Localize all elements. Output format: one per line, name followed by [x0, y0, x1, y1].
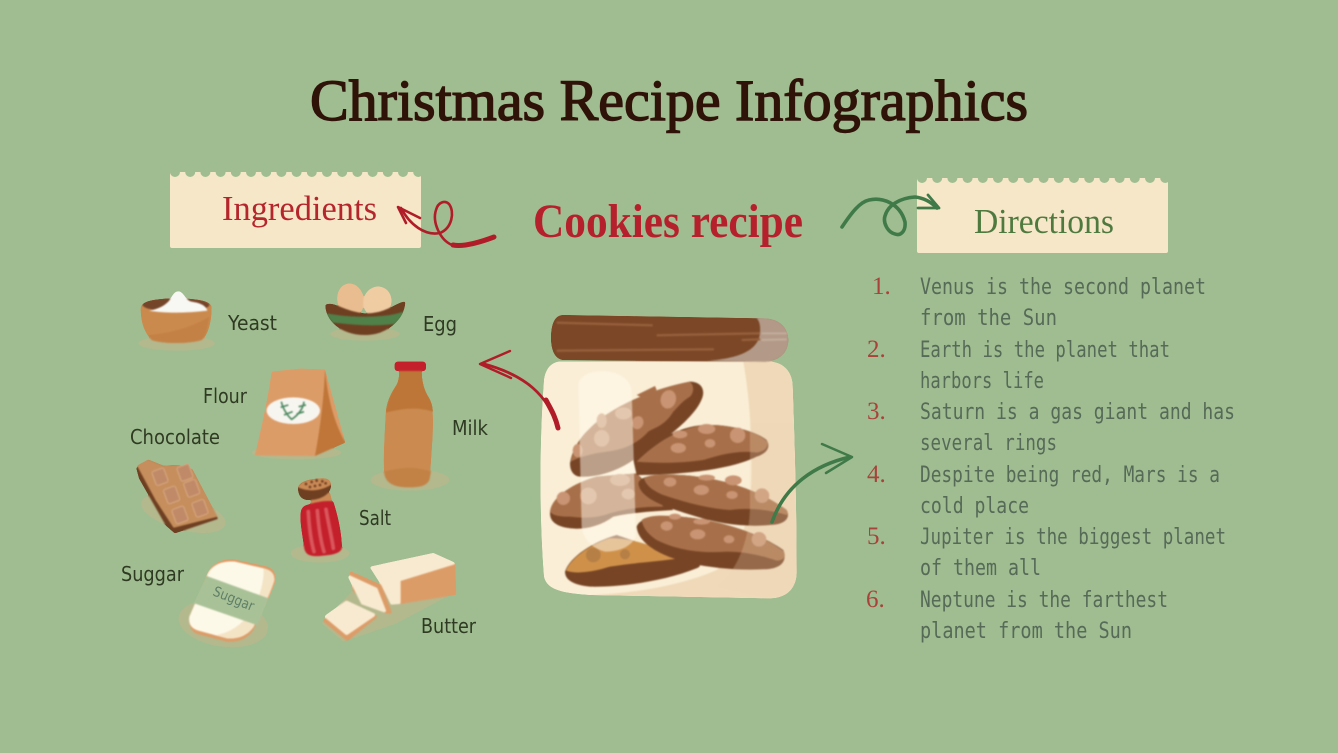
ingredient labels: Chocolate: [130, 425, 220, 449]
cookie: upper right: [633, 424, 768, 475]
step 1: [872, 273, 1206, 331]
step 6: planet from the Sun: [920, 619, 1132, 644]
ingredient labels: Yeast: [227, 311, 277, 335]
panel: directions heading: [917, 178, 1168, 253]
step 1: 1.: [872, 273, 891, 300]
step 6: [866, 586, 1168, 644]
step 6: 6.: [866, 586, 885, 613]
step 4: Despite being red, Mars is a: [920, 463, 1220, 488]
directions list: [866, 273, 1235, 644]
step 3: [867, 398, 1235, 456]
subtitle: cookies recipe: Cookies recipe: [533, 195, 803, 248]
ingredient labels: Milk: [452, 416, 488, 440]
panel: ingredients heading: [170, 172, 421, 248]
cookie: middle right: [638, 474, 788, 526]
icon: milk bottle: [371, 362, 449, 491]
step 3: Saturn is a gas giant and has: [920, 400, 1235, 425]
arrow: jar to ingredients: [480, 351, 558, 428]
icon: yeast bowl: [138, 291, 215, 351]
arrow: to directions: [842, 195, 939, 234]
ingredient labels: Butter: [421, 614, 477, 638]
panel: directions heading: Directions: [974, 202, 1114, 241]
step 2: [867, 336, 1170, 394]
step 2: 2.: [867, 336, 886, 363]
icon: butter: [322, 554, 455, 642]
cookie: bottom right: [637, 514, 785, 570]
step 5: of them all: [920, 556, 1041, 581]
step 2: Earth is the planet that: [920, 338, 1170, 363]
icon: salt shaker: [291, 478, 349, 563]
jar side shade: [590, 362, 797, 598]
ingredient labels: Flour: [203, 384, 248, 408]
arrow: jar to directions: [772, 444, 852, 522]
ingredient labels: Egg: [423, 312, 457, 336]
step 3: 3.: [867, 398, 886, 425]
arrow: to ingredients: [398, 202, 494, 246]
cookie: upper left: [570, 382, 703, 477]
glass right shade: [717, 423, 797, 598]
jar body: [540, 362, 797, 598]
step 3: several rings: [920, 431, 1057, 456]
step 2: harbors life: [920, 369, 1044, 394]
jar lid: [551, 315, 788, 362]
step 1: from the Sun: [920, 306, 1057, 331]
icon: flour bag: [252, 369, 345, 459]
step 1: Venus is the second planet: [920, 275, 1206, 300]
icon: chocolate bar: [137, 461, 229, 541]
step 5: 5.: [867, 523, 886, 550]
step 6: Neptune is the farthest: [920, 588, 1168, 613]
cookie: bottom left: [565, 535, 700, 587]
ingredient labels: Salt: [359, 506, 391, 530]
ingredient labels: [121, 311, 488, 638]
panel: ingredients heading: Ingredients: [222, 189, 377, 228]
icon: cookie jar: [540, 315, 797, 598]
icon: sugar bag: Suggar: [211, 584, 257, 615]
icon: egg bowl: [325, 281, 405, 341]
step 4: [867, 461, 1220, 519]
step 5: [867, 523, 1226, 581]
step 5: Jupiter is the biggest planet: [920, 525, 1226, 550]
icon: sugar bag: [176, 559, 276, 653]
title: Christmas Recipe Infographics: [310, 68, 1028, 133]
glass highlight: [578, 371, 636, 552]
step 4: 4.: [867, 461, 886, 488]
step 4: cold place: [920, 494, 1029, 519]
ingredient labels: Suggar: [121, 562, 185, 586]
cookie: middle left: [550, 473, 673, 529]
